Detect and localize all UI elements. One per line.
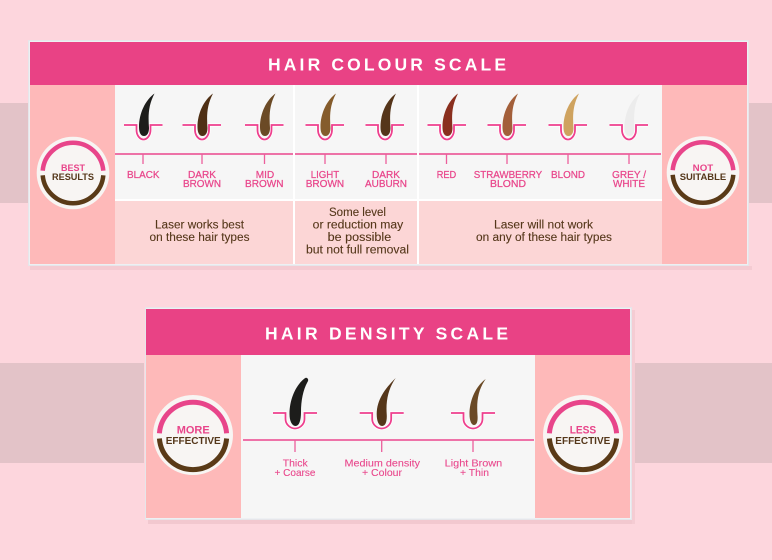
label: dark brown <box>183 169 221 190</box>
icon: mid brown hair <box>245 94 284 140</box>
label: mid brown <box>245 169 284 190</box>
panel: not suitable: SUITABLE <box>680 172 726 183</box>
label: blond: BLOND <box>551 169 585 181</box>
panel: hair colour scale <box>28 40 748 266</box>
icon: light brown hair <box>306 94 344 140</box>
label: grey white <box>612 169 646 190</box>
label: medium density colour <box>344 458 421 479</box>
label: dark brown: DARK <box>188 169 216 181</box>
label: mid brown: MID <box>256 169 275 181</box>
label: light brown: BROWN <box>306 178 344 190</box>
panel: best results <box>30 85 115 264</box>
text: laser will not work <box>476 220 612 244</box>
label: dark auburn: AUBURN <box>365 178 407 190</box>
icon: blond hair <box>548 94 587 140</box>
text: laser will not work: on any of these hair types <box>476 232 612 244</box>
label: strawberry blond <box>474 169 542 190</box>
label: grey white: GREY / <box>612 169 646 181</box>
label: light brown thin <box>445 458 502 479</box>
panel: best results: BEST <box>61 163 85 174</box>
label: black: BLACK <box>127 169 160 181</box>
text: laser works best: Laser works best <box>155 220 245 232</box>
icon: grey white hair <box>610 94 648 140</box>
icon: black hair <box>124 94 162 140</box>
panel: not suitable: NOT <box>693 163 713 174</box>
panel: best results: RESULTS <box>52 172 94 183</box>
heading bar: hair density scale: HAIR DENSITY SCALE <box>265 324 508 344</box>
label: thick coarse: Thick <box>283 458 308 470</box>
panel: more effective <box>146 355 241 518</box>
scale axis <box>115 154 661 164</box>
label: dark auburn <box>365 169 407 190</box>
icon: medium density hair <box>360 378 404 428</box>
label: light brown thin: + Thin <box>460 467 489 479</box>
density axis <box>243 440 534 452</box>
text: laser works best <box>150 220 250 244</box>
label: light brown: LIGHT <box>311 169 340 181</box>
label: mid brown: BROWN <box>245 178 284 190</box>
icon: red hair <box>428 94 466 140</box>
icon: dark auburn hair <box>366 94 404 140</box>
icon: strawberry blond hair <box>488 94 526 140</box>
text: some level of reduction: be possible <box>328 232 391 244</box>
icon: dark brown hair <box>182 94 221 140</box>
text: laser works best: on these hair types <box>150 232 250 244</box>
panel: less effective: LESS <box>570 424 596 436</box>
label: light brown <box>306 169 344 190</box>
label: red: RED <box>437 169 457 181</box>
label: strawberry blond: BLOND <box>490 178 526 190</box>
heading bar: hair colour scale: HAIR COLOUR SCALE <box>268 54 506 74</box>
label: medium density colour: + Colour <box>362 467 402 479</box>
label: dark brown: BROWN <box>183 178 221 190</box>
panel: not suitable <box>662 85 747 264</box>
label: thick coarse: + Coarse <box>274 467 316 479</box>
text: laser will not work: Laser will not work <box>494 220 593 232</box>
text: some level of reduction: Some level <box>329 207 386 219</box>
panel: less effective: EFFECTIVE <box>555 435 610 447</box>
text: some level of reduction: or reduction may <box>313 220 403 232</box>
icon: thick hair <box>273 378 317 428</box>
text: some level of reduction: but not full removal <box>306 244 409 256</box>
icon: thin hair <box>451 379 495 428</box>
label: medium density colour: Medium density <box>344 458 421 470</box>
label: strawberry blond: STRAWBERRY <box>474 169 542 181</box>
label: light brown thin: Light Brown <box>445 458 502 470</box>
panel: hair density scale <box>146 308 632 520</box>
heading bar: hair colour scale <box>30 42 747 85</box>
label: grey white: WHITE <box>613 178 645 190</box>
panel: more effective: MORE <box>177 424 210 436</box>
text: some level of reduction <box>306 207 409 256</box>
panel: less effective <box>535 355 630 518</box>
panel: more effective: EFFECTIVE <box>166 435 221 447</box>
label: thick coarse <box>274 458 316 479</box>
heading bar: hair density scale <box>146 309 630 355</box>
label: dark auburn: DARK <box>372 169 400 181</box>
